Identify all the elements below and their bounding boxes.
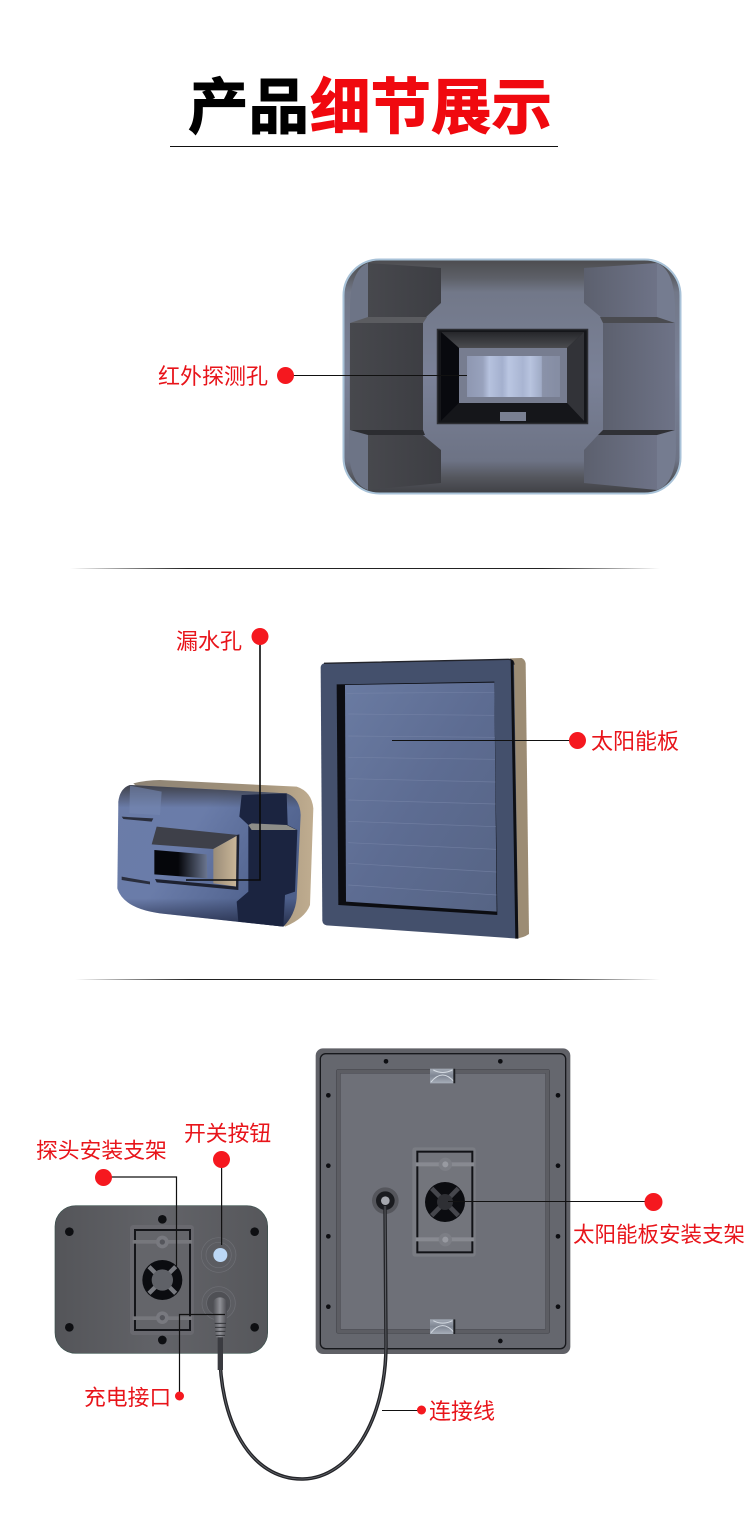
callout: power button: 开关按钮 bbox=[184, 1121, 271, 1146]
divider bbox=[70, 568, 660, 569]
callout: infrared detection hole: 红外探测孔 bbox=[158, 364, 268, 389]
callout: drain hole bbox=[176, 628, 268, 880]
callout: charging port bbox=[84, 1314, 225, 1410]
callout: infrared detection hole bbox=[158, 364, 467, 389]
callout: charging port: 充电接口 bbox=[84, 1385, 171, 1410]
callout: power button bbox=[184, 1121, 271, 1245]
product photo: infrared sensor front view bbox=[344, 260, 680, 494]
callout: solar panel mounting bracket bbox=[448, 1193, 745, 1247]
title: 细节展示 bbox=[310, 73, 552, 141]
callout: solar panel: 太阳能板 bbox=[591, 729, 679, 754]
callout: drain hole: 漏水孔 bbox=[176, 629, 242, 654]
callout: connecting cable bbox=[382, 1399, 495, 1424]
callout: solar panel mounting bracket: 太阳能板安装支架 bbox=[573, 1223, 745, 1247]
callout: solar panel bbox=[392, 729, 679, 754]
title bbox=[170, 73, 558, 147]
connecting cable bbox=[220, 1206, 386, 1479]
product photo: solar panel front bbox=[321, 658, 529, 939]
callout: connecting cable: 连接线 bbox=[429, 1399, 495, 1424]
product photo: solar panel back bbox=[316, 1048, 570, 1354]
callout: probe mounting bracket bbox=[36, 1138, 176, 1266]
callout: probe mounting bracket: 探头安装支架 bbox=[36, 1138, 167, 1163]
title: 产品 bbox=[188, 73, 309, 141]
product photo: sensor back bbox=[55, 1206, 268, 1370]
product photo: sensor angled view bbox=[117, 780, 313, 927]
divider bbox=[75, 979, 660, 980]
